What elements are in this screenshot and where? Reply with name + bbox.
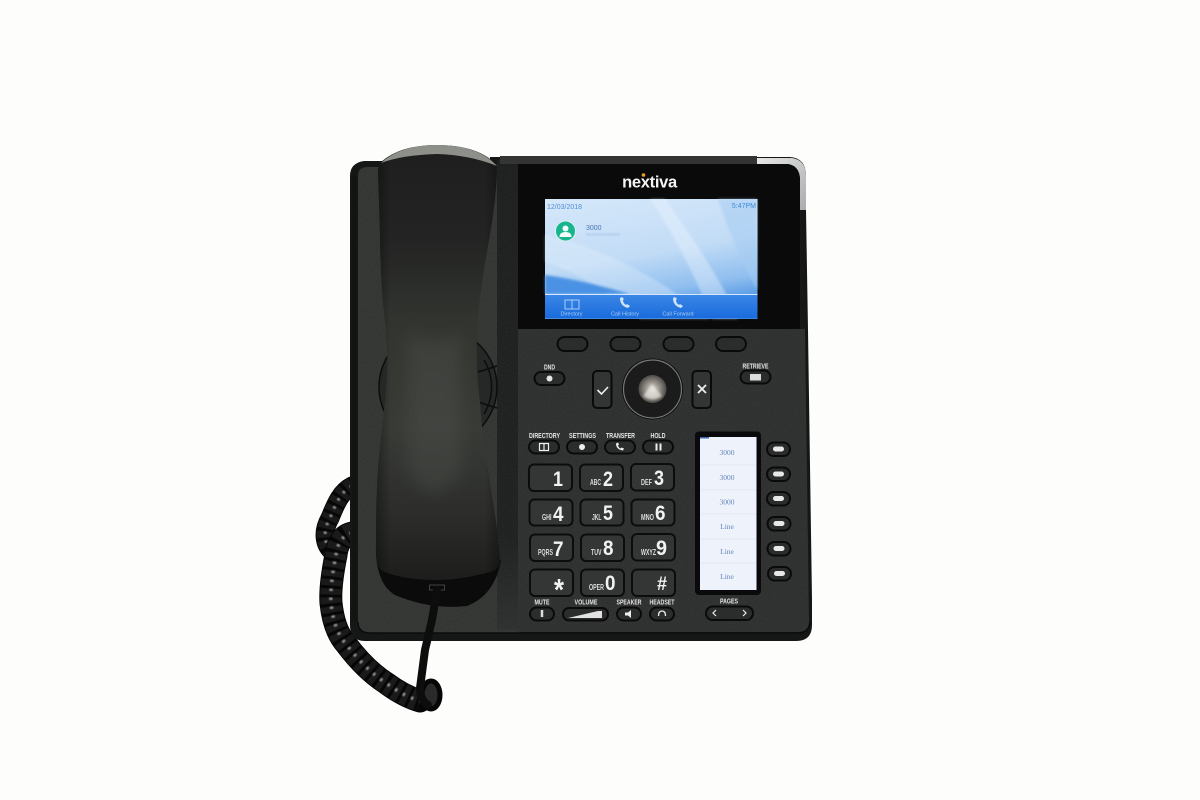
dial pad: 8 [603,537,614,560]
dial pad: 5 [603,502,613,525]
side display: Line [720,572,735,581]
side display: 3000 [720,473,735,482]
bottom control keys: VOLUME [574,600,598,606]
bottom control keys: SPEAKER [616,600,642,606]
bottom control keys: HEADSET [650,600,675,606]
dial pad: PQRS [538,548,553,557]
dial pad: DEF [641,478,652,487]
dial pad: 4 [553,503,564,526]
side display: 3000 [720,448,735,457]
dial pad: WXYZ [641,548,656,557]
navigation ring [622,358,683,420]
dial pad: OPER [589,583,604,592]
function keys: SETTINGS [569,433,596,440]
line keys [767,442,791,580]
phone [325,145,812,709]
cancel button [692,371,711,408]
status bar and contact: 5:47PM [732,203,756,210]
accept button [593,371,612,408]
dial pad: 2 [603,468,613,491]
soft key bar: Directory [560,312,583,318]
logo: nextiva [622,174,678,192]
dial pad: 0 [605,572,616,595]
dial pad: 3 [654,467,664,490]
DND button [534,364,564,385]
dial pad: 9 [656,537,667,560]
side display: Line [720,547,735,556]
side display [695,432,761,595]
side display: 3000 [720,498,735,506]
pages key [706,598,753,620]
dial pad: MNO [641,513,654,522]
dial pad: 6 [655,502,666,525]
status bar and contact [547,203,756,241]
function keys: DIRECTORY [529,433,560,440]
soft key bar [545,294,758,318]
dial pad: TUV [591,548,602,557]
straight handset cord [420,590,437,705]
dial pad: ABC [590,478,601,487]
retrieve button [740,364,770,384]
function keys: HOLD [650,433,666,440]
dial pad: JKL [592,513,602,522]
side display: Line [720,522,735,531]
silver corner trim [757,158,806,210]
pages key: PAGES [720,598,738,606]
dial pad [529,464,675,607]
display bezel [500,156,800,329]
status bar and contact: 12/03/2018 [547,204,582,211]
retrieve button: RETRIEVE [742,364,769,370]
dial pad: # [657,574,667,595]
dial pad: * [554,572,565,607]
soft key bar: Call History [611,312,639,318]
speaker grille [379,328,497,446]
dial pad: 7 [553,538,564,561]
coiled handset cord [325,486,440,709]
DND button: DND [544,364,555,372]
status bar and contact: 3000 [586,225,602,232]
bottom control keys [530,600,675,620]
main screen [545,199,758,319]
function keys [529,433,673,454]
dial pad: GHI [542,513,552,522]
handset [376,145,501,607]
dial pad: 1 [553,468,563,491]
soft keys [558,337,746,351]
soft key bar: Call Forward [662,312,694,318]
bottom control keys: MUTE [534,600,550,606]
function keys: TRANSFER [606,433,635,440]
phone body [350,157,812,641]
